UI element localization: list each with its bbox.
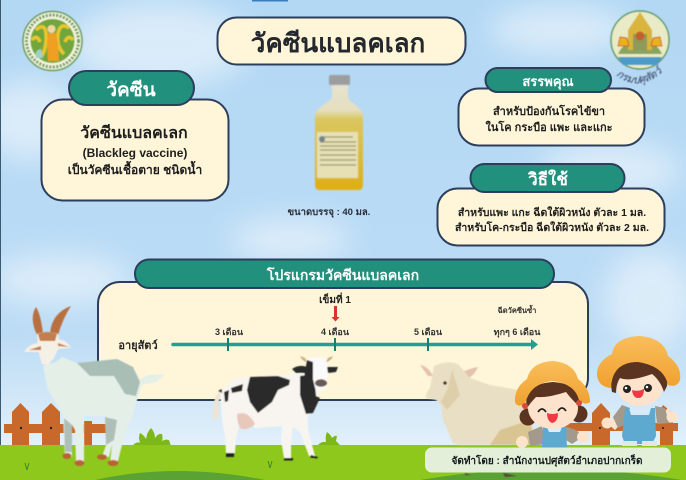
illustration: cow bbox=[212, 356, 338, 460]
cow udder bbox=[237, 413, 255, 429]
boy head bbox=[617, 366, 663, 406]
girl face bbox=[538, 408, 566, 412]
text: usage description bbox=[455, 205, 649, 234]
illustration: sheep bbox=[420, 362, 535, 477]
timeline chart: ทุกๆ 6 เดือน bbox=[494, 326, 541, 338]
girl overalls bbox=[542, 427, 567, 448]
timeline chart: 4 เดือน bbox=[321, 326, 350, 337]
girl head bbox=[528, 387, 578, 429]
girl arms bbox=[528, 426, 584, 446]
text: usage description: สำหรับแพะ แกะ ฉีดใต้ผิวหนัง ตัวละ 1 มล. bbox=[458, 205, 646, 219]
title: วัคซีนแบลคเลก bbox=[251, 28, 425, 58]
timeline chart: เข็มที่ 1 bbox=[319, 292, 351, 306]
cow body bbox=[220, 373, 320, 458]
heading: benefits: สรรพคุณ bbox=[522, 74, 574, 90]
fence right bbox=[565, 403, 678, 446]
cow hooves bbox=[226, 453, 318, 460]
heading: benefits bbox=[486, 68, 611, 92]
panel: benefits bbox=[458, 68, 644, 146]
boy face bbox=[623, 385, 631, 393]
panel: vaccine program bbox=[98, 260, 588, 400]
text: benefits description: ในโค กระบือ แพะ และแกะ bbox=[485, 120, 613, 134]
text: vaccine description: เป็นวัคซีนเชื้อตาย ชนิดน้ำ bbox=[68, 160, 202, 177]
icon: right emblem bbox=[610, 10, 670, 86]
timeline chart: ฉีดวัคซีนซ้ำ bbox=[497, 304, 536, 315]
panel: usage bbox=[438, 164, 664, 246]
fence left bbox=[4, 403, 119, 446]
text: vaccine description: (Blackleg vaccine) bbox=[83, 146, 187, 160]
illustration: boy bbox=[597, 336, 680, 446]
text: benefits description bbox=[485, 104, 613, 134]
text: usage description: สำหรับโค-กระบือ ฉีดใต้ผิวหนัง ตัวละ 2 มล. bbox=[455, 220, 649, 234]
icon: left emblem bbox=[23, 12, 82, 70]
boy hat bbox=[597, 336, 680, 388]
grass ground bbox=[0, 428, 686, 480]
text: benefits description: สำหรับป้องกันโรคไข้ขา bbox=[493, 104, 605, 118]
top tab decoration bbox=[252, 0, 288, 2]
timeline chart bbox=[118, 292, 541, 353]
heading: usage bbox=[470, 164, 624, 192]
heading: usage: วิธีใช้ bbox=[528, 169, 568, 189]
text: package size: ขนาดบรรจุ : 40 มล. bbox=[288, 207, 370, 218]
label: animal age: อายุสัตว์ bbox=[118, 339, 158, 353]
heading: vaccine program: โปรแกรมวัคซีนแบลคเลก bbox=[266, 266, 419, 283]
cow head bbox=[307, 358, 328, 391]
text: vaccine description: วัคซีนแบลคเลก bbox=[80, 123, 188, 142]
illustration: goat bbox=[24, 306, 165, 466]
timeline chart: 3 เดือน bbox=[215, 326, 244, 337]
title bbox=[218, 18, 466, 64]
cow tail bbox=[212, 390, 224, 420]
illustration: girl bbox=[515, 361, 590, 448]
heading: vaccine: วัคซีน bbox=[106, 79, 156, 101]
timeline chart: 5 เดือน bbox=[414, 326, 443, 337]
girl pigtails bbox=[520, 408, 536, 426]
boy overalls bbox=[622, 408, 656, 444]
icon: vaccine bottle bbox=[315, 75, 363, 190]
heading: vaccine program bbox=[135, 260, 554, 288]
cow patches bbox=[218, 374, 320, 414]
arrow: first dose bbox=[332, 306, 340, 322]
goat hooves bbox=[62, 453, 72, 459]
credit bar bbox=[425, 448, 671, 472]
goat horns bbox=[33, 306, 71, 335]
girl hat bbox=[515, 361, 590, 406]
text: vaccine description bbox=[68, 123, 202, 177]
goat head bbox=[24, 332, 71, 365]
goat body bbox=[43, 357, 165, 463]
boy arms bbox=[608, 408, 676, 430]
label: department name: กรมปศุสัตว์ bbox=[616, 64, 662, 86]
heading: vaccine bbox=[69, 71, 194, 105]
panel: vaccine bbox=[42, 71, 228, 200]
credit bar: จัดทำโดย : สำนักงานปศุสัตว์อำเภอปากเกร็ด bbox=[451, 453, 643, 467]
